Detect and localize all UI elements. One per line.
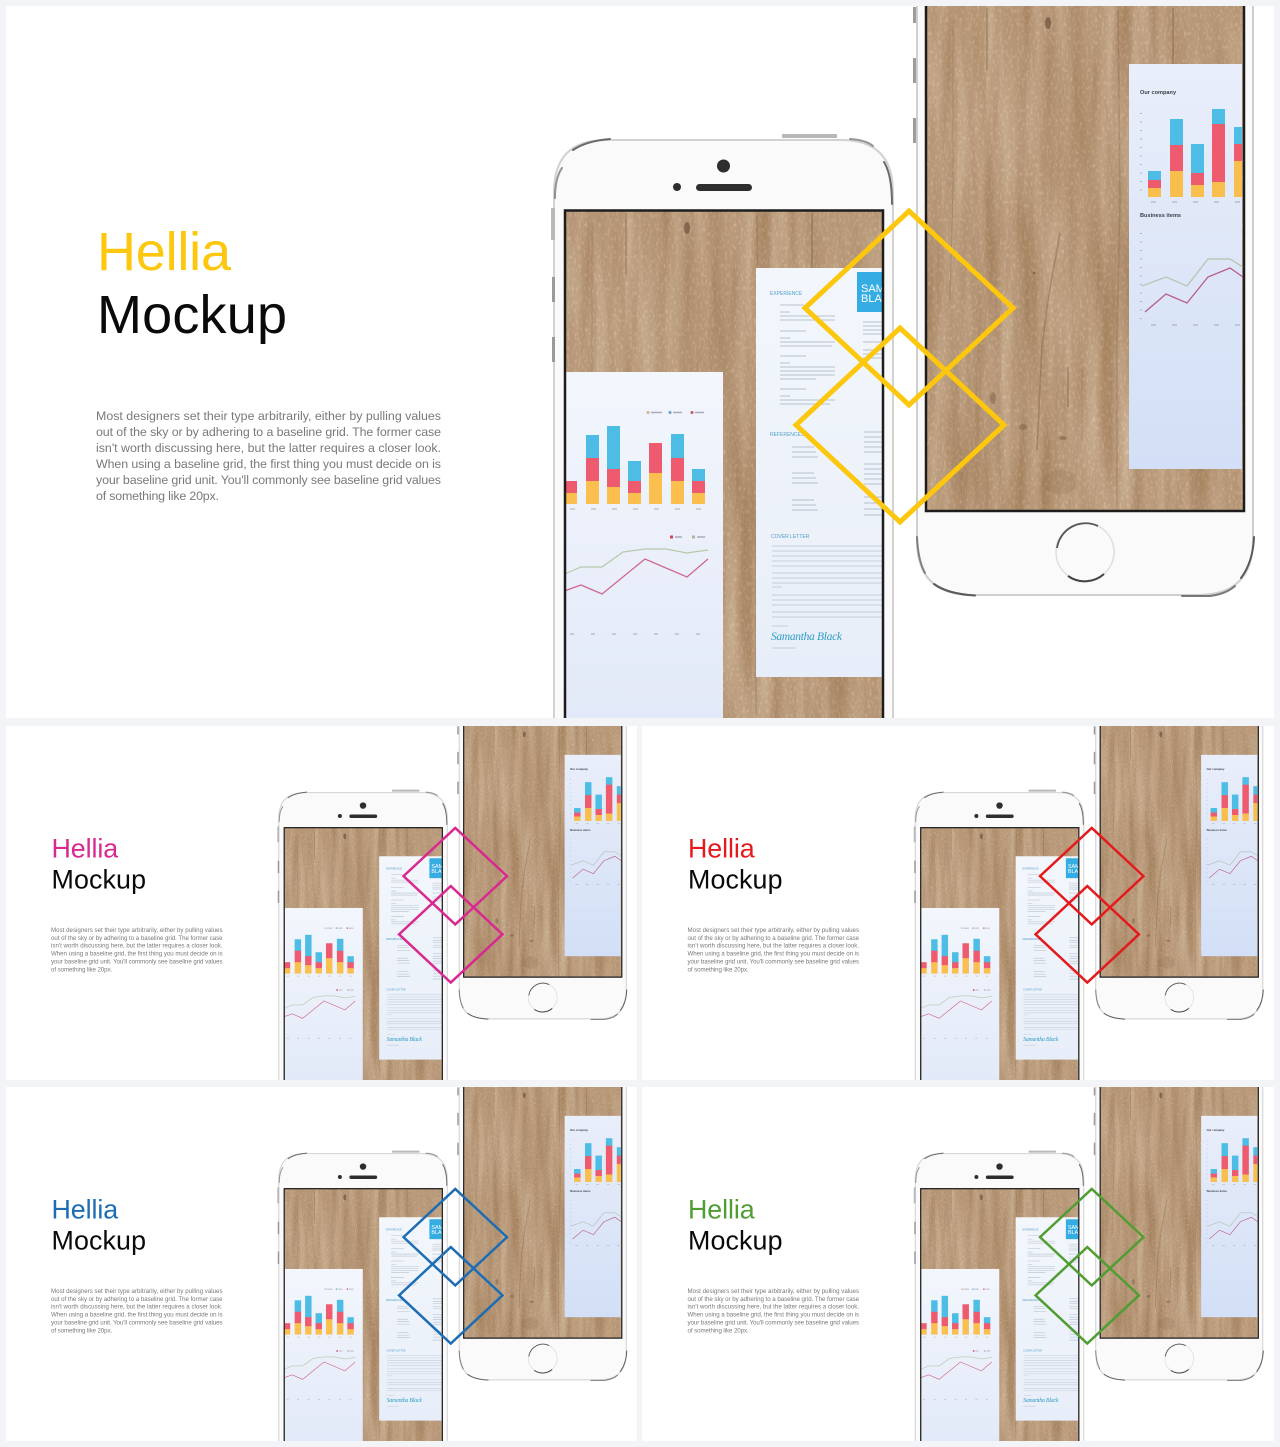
resume headings: COVER LETTER	[771, 534, 810, 540]
body text: out of the sky or by adhering to a baseline grid. The former case	[688, 935, 860, 942]
body text	[96, 409, 441, 503]
phone body	[554, 140, 893, 720]
body text	[51, 1288, 223, 1335]
title: Hellia	[97, 222, 232, 282]
title	[52, 833, 146, 895]
title: Hellia	[688, 833, 755, 863]
body text: out of the sky or by adhering to a baseline grid. The former case	[96, 425, 441, 439]
resume headings: REFERENCES	[770, 432, 805, 438]
body text: out of the sky or by adhering to a baseline grid. The former case	[51, 935, 223, 942]
phone edge highlights	[555, 139, 892, 204]
document: resume	[756, 268, 886, 677]
title: Hellia	[52, 1194, 118, 1224]
panel: green slide	[642, 1087, 1274, 1441]
body text: out of the sky or by adhering to a baseline grid. The former case	[688, 1296, 860, 1303]
document: company charts	[1129, 64, 1243, 469]
body text: isn't worth discussing here, but the latter requires a closer look.	[688, 1304, 859, 1311]
body text: of something like 20px.	[96, 489, 219, 503]
body text: Most designers set their type arbitrarily, either by pulling values	[688, 1288, 859, 1295]
body text: of something like 20px.	[688, 967, 749, 974]
title	[688, 1194, 782, 1256]
title: Mockup	[52, 865, 146, 895]
body text: When using a baseline grid, the first thing you must decide on is	[96, 457, 441, 471]
phone mockups	[277, 723, 627, 1091]
body text: out of the sky or by adhering to a baseline grid. The former case	[51, 1296, 223, 1303]
title	[97, 222, 287, 345]
chart headings: Business items	[1140, 213, 1181, 219]
body text	[688, 927, 860, 974]
resume text lines	[780, 305, 883, 515]
body text: your baseline grid unit. You'll commonly see baseline grid values	[51, 959, 223, 966]
body text: of something like 20px.	[51, 967, 112, 974]
signature: Samantha Black	[771, 631, 843, 643]
document: charts	[560, 372, 723, 722]
panel: magenta slide	[6, 726, 637, 1080]
body text: your baseline grid unit. You'll commonly see baseline grid values	[96, 473, 441, 487]
line chart	[1141, 233, 1243, 325]
diamond outlines: blue	[399, 1189, 507, 1344]
body text: your baseline grid unit. You'll commonly see baseline grid values	[51, 1320, 223, 1327]
body text: When using a baseline grid, the first thing you must decide on is	[51, 1312, 223, 1319]
title	[688, 833, 782, 895]
title: Hellia	[52, 833, 118, 863]
diamond outlines: yellow	[796, 211, 1013, 522]
resume headings: EXPERIENCE	[770, 291, 803, 297]
body text: When using a baseline grid, the first thing you must decide on is	[51, 951, 223, 958]
title: Hellia	[688, 1194, 755, 1224]
body text: isn't worth discussing here, but the latter requires a closer look.	[96, 441, 441, 455]
phone body	[917, 0, 1253, 595]
chart headings	[1140, 90, 1181, 219]
body text: isn't worth discussing here, but the latter requires a closer look.	[51, 943, 223, 950]
panel: main yellow slide	[6, 6, 1274, 718]
phone mockups scene	[551, 0, 1254, 741]
phone mockups	[914, 1084, 1263, 1447]
panel: red slide	[642, 726, 1274, 1080]
wood background	[566, 211, 882, 741]
phone mockups	[277, 1084, 627, 1447]
phone mockups	[914, 723, 1263, 1091]
title: Mockup	[688, 865, 782, 895]
diamond outlines: red	[1036, 828, 1143, 983]
stacked bar chart	[1141, 109, 1242, 202]
chart headings: Our company	[1140, 90, 1177, 96]
screen frame	[926, 0, 1244, 511]
body text: your baseline grid unit. You'll commonly see baseline grid values	[688, 959, 859, 966]
camera and speaker	[673, 160, 752, 191]
title	[52, 1194, 146, 1256]
screen frame	[565, 210, 883, 740]
title: Mockup	[97, 285, 287, 345]
title: Mockup	[688, 1226, 782, 1256]
body text: Most designers set their type arbitrarily, either by pulling values	[51, 1288, 223, 1295]
screen wood	[927, 6, 1243, 536]
body text	[688, 1288, 860, 1335]
body text: Most designers set their type arbitrarily, either by pulling values	[688, 927, 859, 934]
diamond outlines: magenta	[399, 828, 507, 983]
body text	[51, 927, 223, 974]
body text: When using a baseline grid, the first thing you must decide on is	[688, 1312, 859, 1319]
body text: Most designers set their type arbitrarily, either by pulling values	[96, 409, 441, 423]
side buttons	[551, 134, 837, 362]
phone: back right	[913, 0, 1254, 596]
home button	[1056, 523, 1114, 581]
side buttons	[913, 7, 916, 143]
body text: isn't worth discussing here, but the latter requires a closer look.	[51, 1304, 223, 1311]
body text: When using a baseline grid, the first thing you must decide on is	[688, 951, 859, 958]
stacked bar chart	[564, 426, 705, 509]
body text: of something like 20px.	[51, 1328, 112, 1335]
resume headings	[770, 291, 810, 540]
resume name block	[857, 272, 885, 312]
bar chart legend	[646, 411, 704, 414]
resume name block: BLA	[861, 293, 882, 305]
resume name block: SAM	[861, 283, 885, 295]
body text: isn't worth discussing here, but the latter requires a closer look.	[688, 943, 859, 950]
screen content	[560, 211, 886, 741]
body text: your baseline grid unit. You'll commonly see baseline grid values	[688, 1320, 859, 1327]
panel: blue slide	[6, 1087, 637, 1441]
body text: of something like 20px.	[688, 1328, 749, 1335]
phone: front left	[551, 134, 893, 741]
line chart	[560, 537, 708, 634]
phone edge highlights	[917, 537, 1254, 596]
title: Mockup	[52, 1226, 146, 1256]
body text: Most designers set their type arbitrarily, either by pulling values	[51, 927, 223, 934]
diamond outlines: green	[1036, 1189, 1143, 1344]
